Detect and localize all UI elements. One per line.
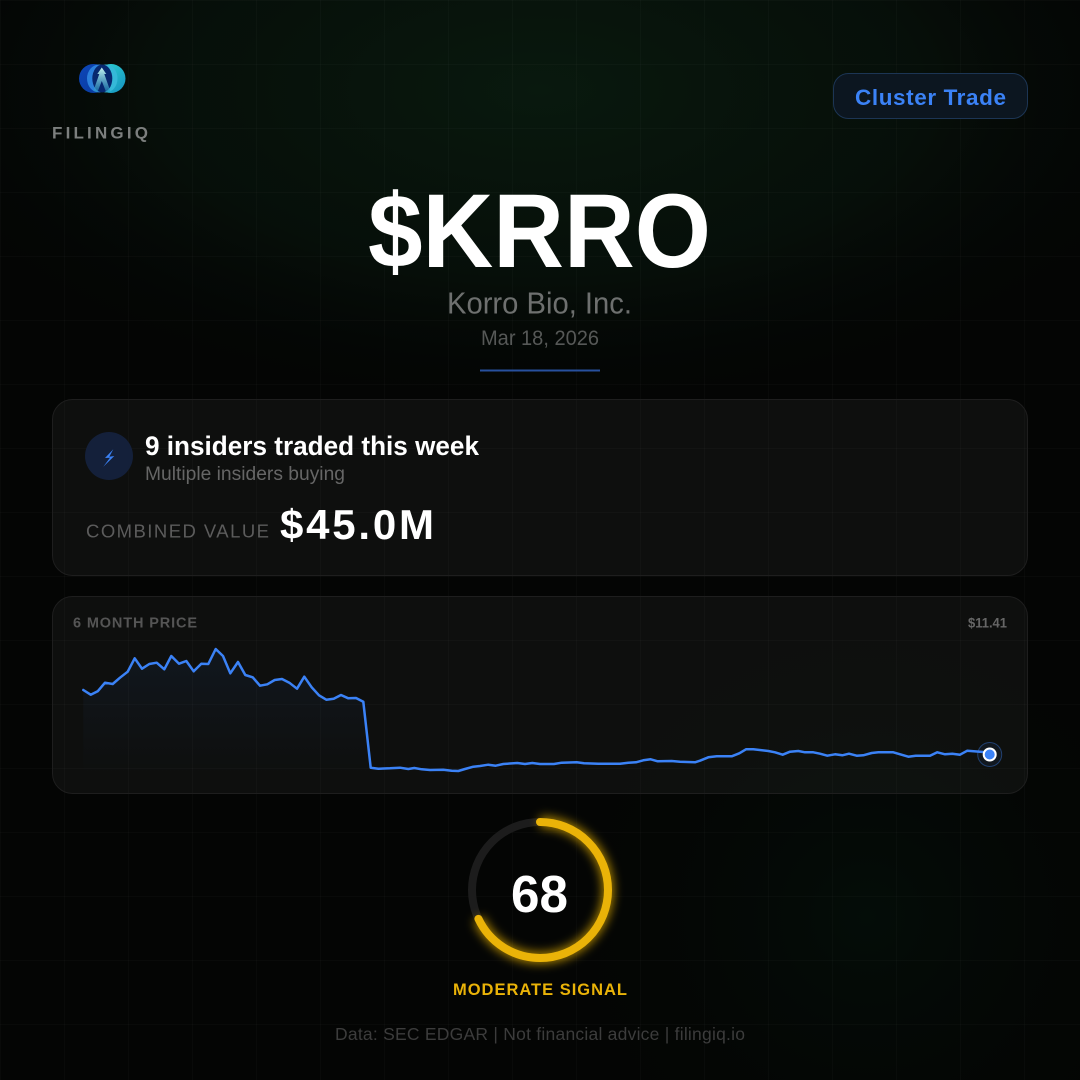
signal label: MODERATE SIGNAL xyxy=(453,981,627,999)
panel: cluster summary xyxy=(52,400,1028,576)
value: $45.0M: $45.0M xyxy=(280,501,434,548)
logo wordmark: FILINGIQ xyxy=(52,124,148,142)
gauge track xyxy=(472,822,608,958)
score: 68 xyxy=(511,866,568,924)
chart label: 6 MONTH PRICE xyxy=(73,616,197,632)
label: combined value: COMBINED VALUE xyxy=(86,520,269,542)
icon: logo mark xyxy=(79,64,126,93)
badge: Cluster Trade xyxy=(834,74,1028,118)
icon: lightning bolt xyxy=(85,432,133,480)
badge: Cluster Trade: Cluster Trade xyxy=(855,85,1006,110)
gauge progress xyxy=(472,822,608,958)
gauge glow xyxy=(472,822,608,958)
heading: insiders traded: 9 insiders traded this week xyxy=(145,431,480,461)
date: Mar 18, 2026 xyxy=(481,326,599,350)
company name: Korro Bio, Inc. xyxy=(447,286,632,320)
footer: Data: SEC EDGAR | Not financial advice | filingiq.io xyxy=(335,1024,745,1044)
subheading: Multiple insiders buying xyxy=(145,464,345,485)
divider xyxy=(480,370,600,372)
line chart xyxy=(83,649,990,775)
current price marker xyxy=(978,742,1002,766)
panel: 6 month price chart xyxy=(52,596,1028,794)
ticker title: $KRRO xyxy=(368,173,711,290)
latest price: $11.41 xyxy=(968,614,1007,630)
gauge: signal score xyxy=(472,822,608,958)
logo: FilingIQ xyxy=(52,64,148,142)
